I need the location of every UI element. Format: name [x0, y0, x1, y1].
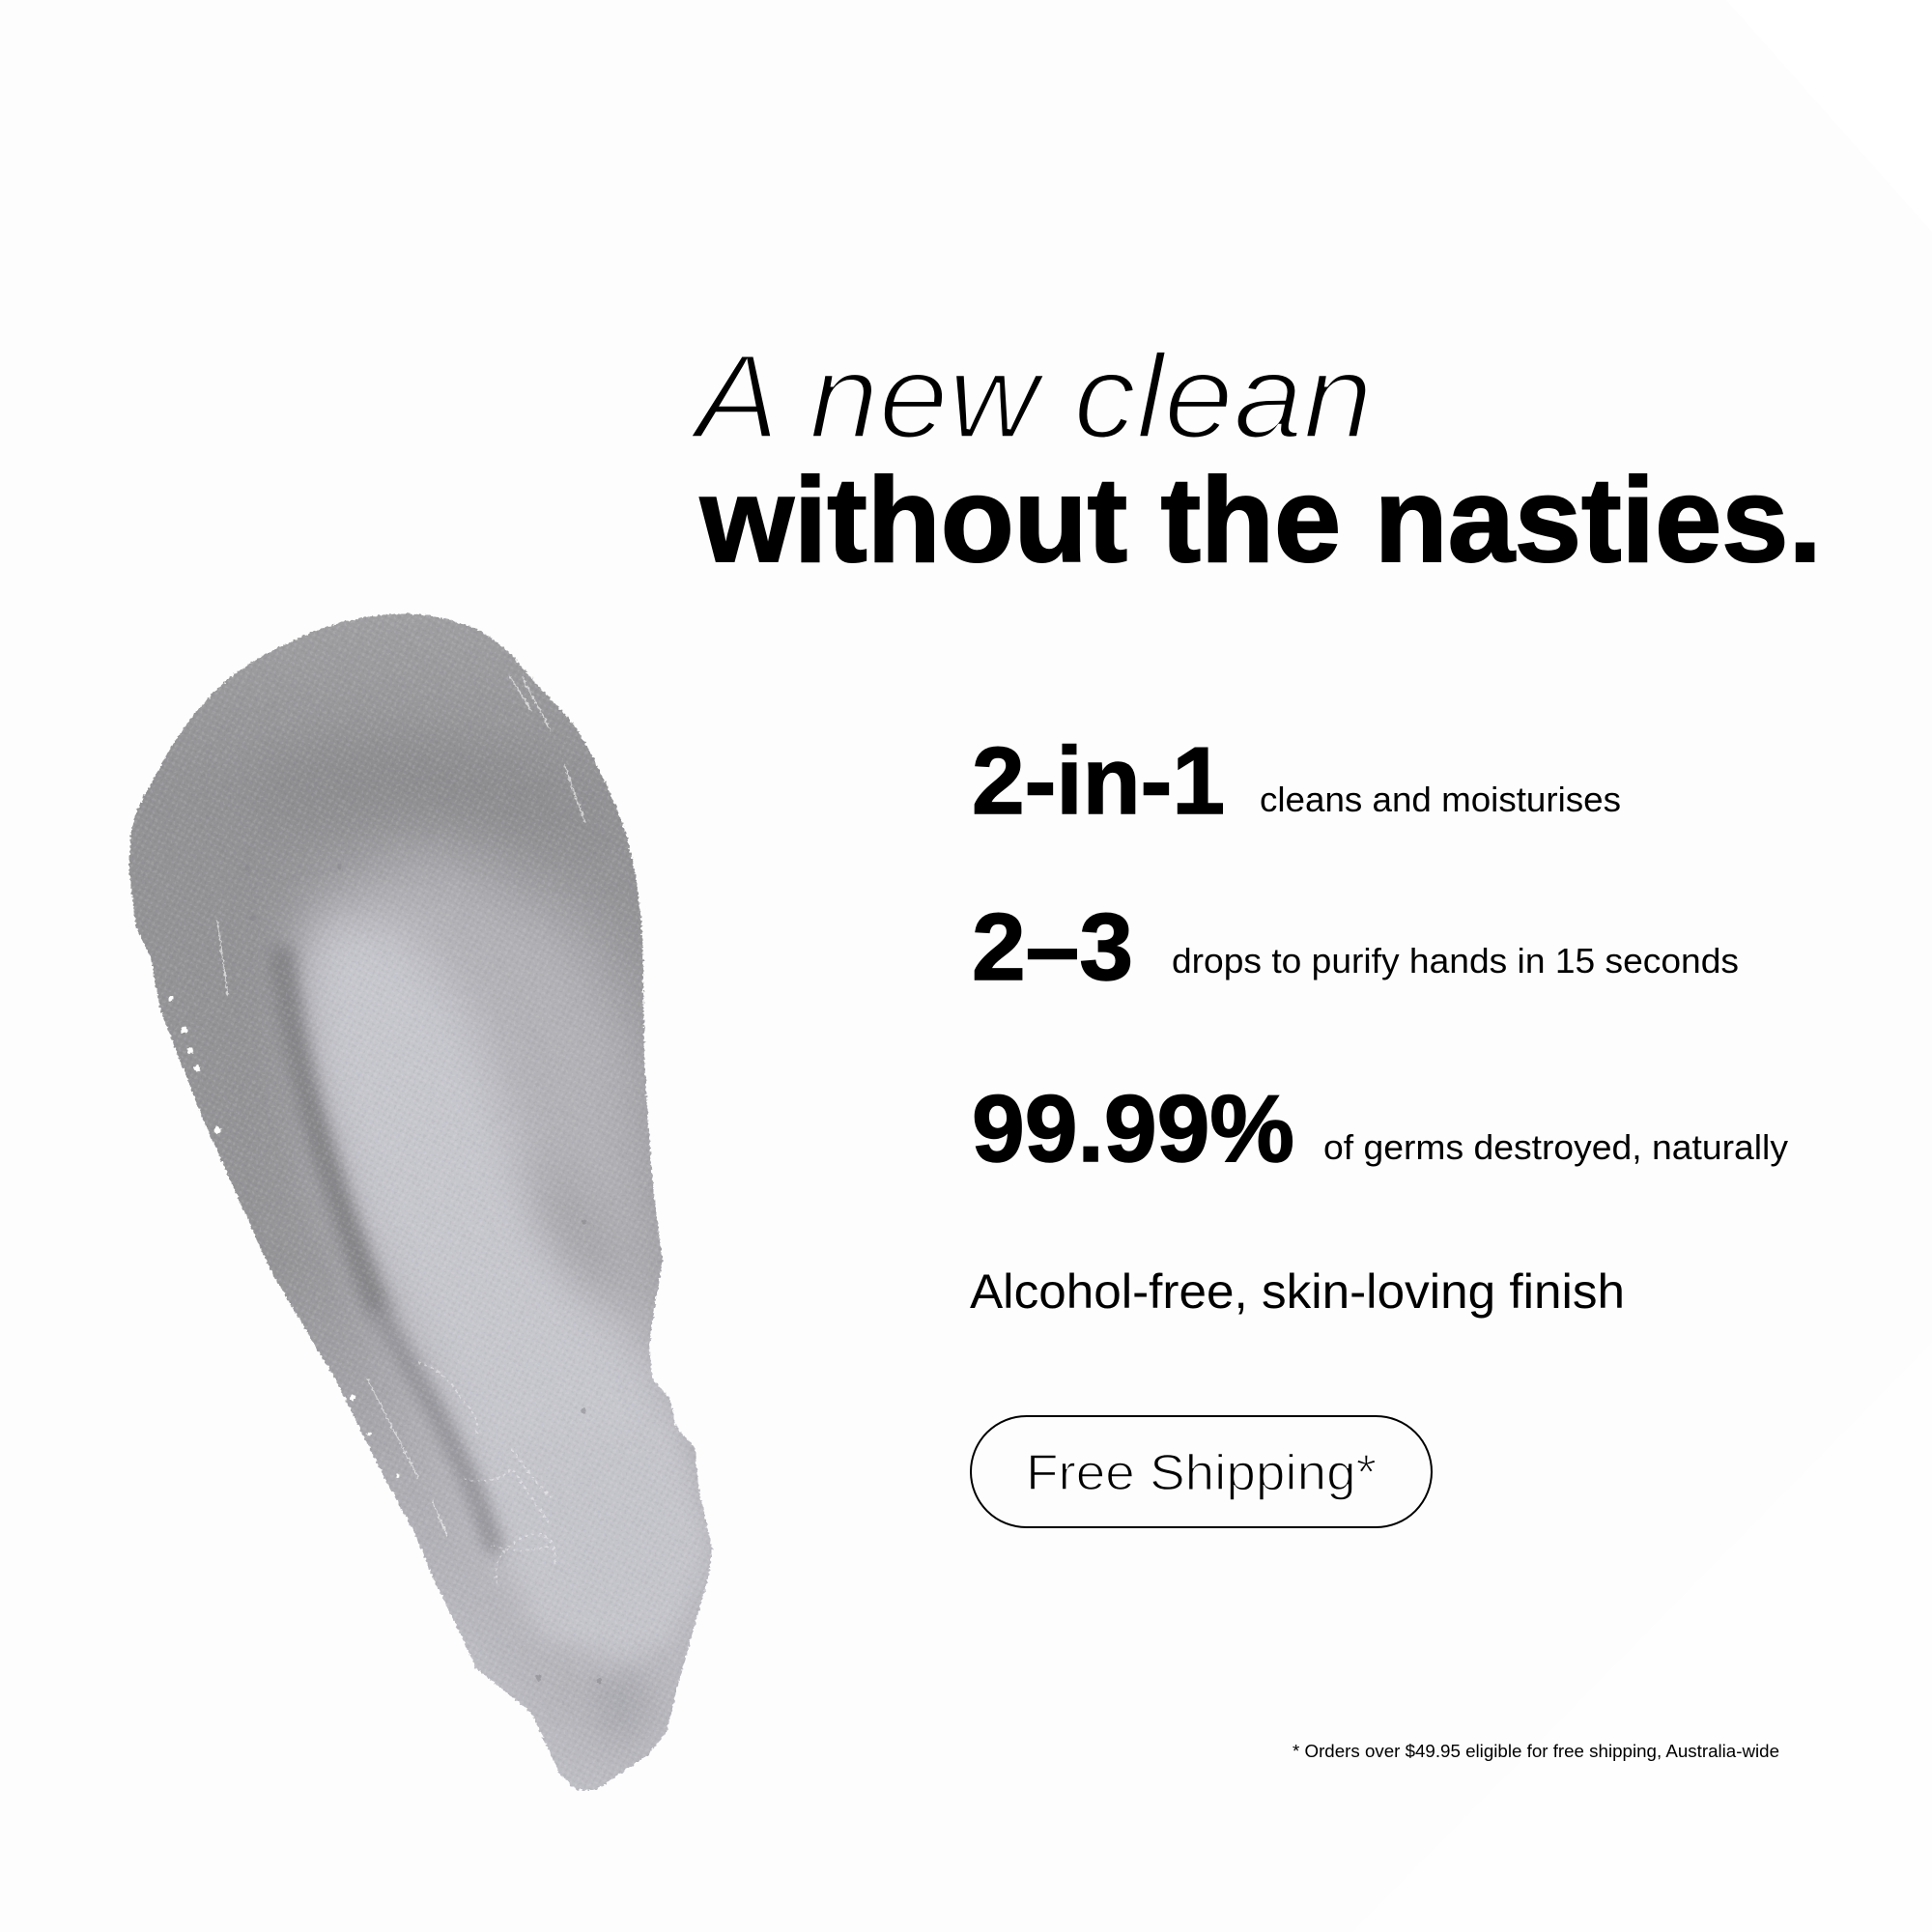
swatch mid tone [309, 840, 715, 1797]
stat: 2-in-1 [972, 727, 1621, 834]
stat: 99.99%: 99.99% [972, 1075, 1294, 1181]
product swatch: grey gel smear [128, 612, 713, 1791]
stat: 99.99%: of germs destroyed, naturally [1323, 1127, 1788, 1167]
stat: 2-in-1: 2-in-1 [972, 727, 1225, 834]
stat: 2–3 [972, 894, 1739, 1000]
title line 2: without the nasties. [699, 454, 1822, 587]
swatch glossy highlights [168, 675, 585, 1584]
swatch bottom tip shade [611, 1680, 636, 1712]
benefit line: Alcohol-free, skin-loving finish [970, 1264, 1625, 1319]
stat: 99.99% [972, 1075, 1788, 1181]
button: free shipping: Free Shipping* [1026, 1445, 1377, 1501]
swatch texture [128, 614, 662, 1553]
swatch lower fill [493, 1420, 705, 1642]
swatch crease shadow [281, 956, 494, 1546]
stat: 2-in-1: cleans and moisturises [1260, 780, 1621, 819]
swatch right shadow [528, 1179, 610, 1290]
swatch specks [244, 864, 601, 1683]
footnote: * Orders over $49.95 eligible for free shipping, Australia-wide [1293, 1741, 1779, 1761]
button: free shipping [971, 1416, 1432, 1527]
title line 1: A new clean [689, 330, 1373, 464]
title [689, 330, 1822, 587]
stat: 2–3: drops to purify hands in 15 seconds [1172, 941, 1739, 980]
stat: 2–3: 2–3 [972, 894, 1133, 1000]
swatch light centre [301, 918, 705, 1681]
swatch top shadow [251, 739, 599, 850]
